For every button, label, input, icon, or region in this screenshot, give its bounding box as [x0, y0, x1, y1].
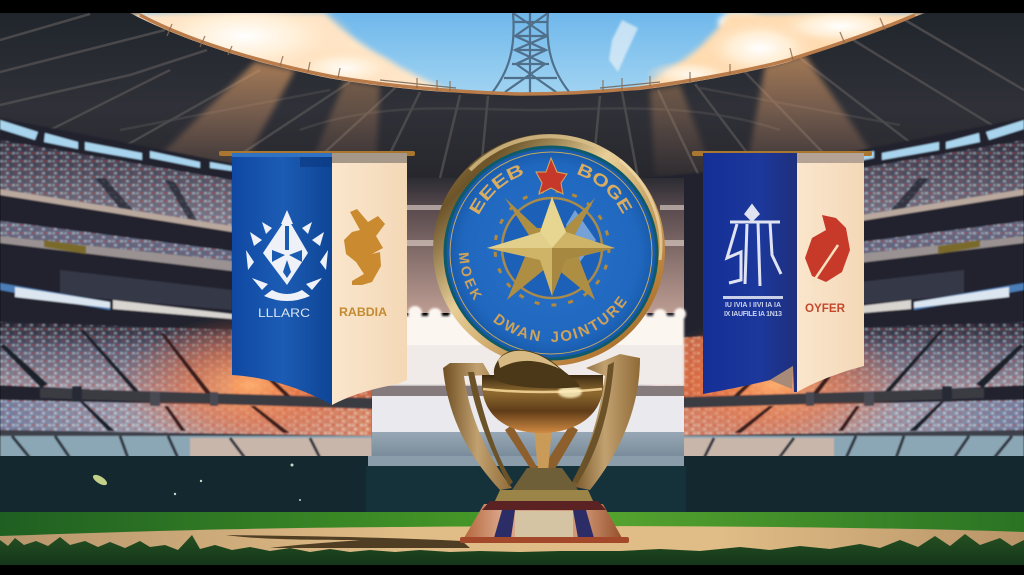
medallion highlights — [470, 136, 600, 170]
grass strip — [0, 512, 1024, 536]
roof edge rim — [140, 15, 915, 94]
right banner rule — [723, 296, 783, 299]
light shafts from roof — [150, 55, 880, 180]
medallion ring — [502, 198, 602, 298]
right banner small label: IU IVIA I IIVI IA IA — [725, 302, 781, 309]
left banner rod — [219, 151, 415, 156]
left banner cream half — [332, 153, 407, 405]
medallion: JOINTURE — [551, 296, 627, 342]
dirt track — [0, 526, 1024, 556]
outfield wall — [0, 456, 1024, 514]
right banner white emblem — [727, 206, 781, 286]
trophy stem — [505, 425, 578, 474]
right glow — [630, 13, 925, 91]
floodlight tower — [492, 13, 570, 93]
left banner emblem detail — [272, 226, 302, 278]
medallion face — [445, 147, 657, 359]
left banner — [219, 151, 415, 405]
upper and lower stands — [0, 118, 1024, 460]
right banner small label: IX IAUFILE IA 1N13 — [724, 311, 782, 318]
left banner label: LLLARC — [258, 306, 310, 320]
medallion — [433, 134, 665, 366]
left banner gold emblem — [344, 209, 385, 285]
right banner small label — [724, 302, 782, 318]
trophy — [443, 350, 640, 543]
flying debris — [91, 473, 109, 487]
left banner white emblem — [246, 210, 328, 301]
roof trusses — [0, 14, 1024, 180]
left banner blue half — [232, 153, 332, 405]
left glow — [130, 13, 456, 93]
trophy shadow on dirt — [226, 535, 470, 548]
medallion: BOGE — [577, 163, 632, 214]
stadium roof — [0, 13, 1024, 185]
medallion: DWAN — [493, 313, 540, 342]
left banner gold label: RABDIA — [339, 305, 387, 319]
roof railing posts — [167, 18, 885, 91]
medallion star — [487, 197, 615, 300]
trophy base — [460, 468, 629, 543]
right banner red emblem — [805, 215, 850, 282]
black bottom bar — [0, 565, 1024, 575]
sky — [130, 12, 930, 103]
foreground turf — [0, 534, 1024, 565]
trophy handles — [443, 354, 640, 490]
right banner rod — [692, 151, 872, 156]
white crowd — [372, 306, 686, 386]
medallion lettering: EEEB — [469, 165, 523, 214]
right banner — [692, 151, 872, 394]
trophy bowl — [482, 375, 603, 433]
right banner red label: OYFER — [805, 301, 845, 315]
medallion: MOEK — [458, 252, 482, 301]
light glow on roof opening — [130, 13, 925, 93]
black top bar — [0, 0, 1024, 13]
right banner cream half — [797, 153, 864, 392]
rugby ball on trophy — [494, 350, 580, 388]
right banner blue half — [703, 153, 797, 394]
centre stands behind the trophy — [372, 178, 686, 470]
medallion red star — [536, 158, 567, 194]
